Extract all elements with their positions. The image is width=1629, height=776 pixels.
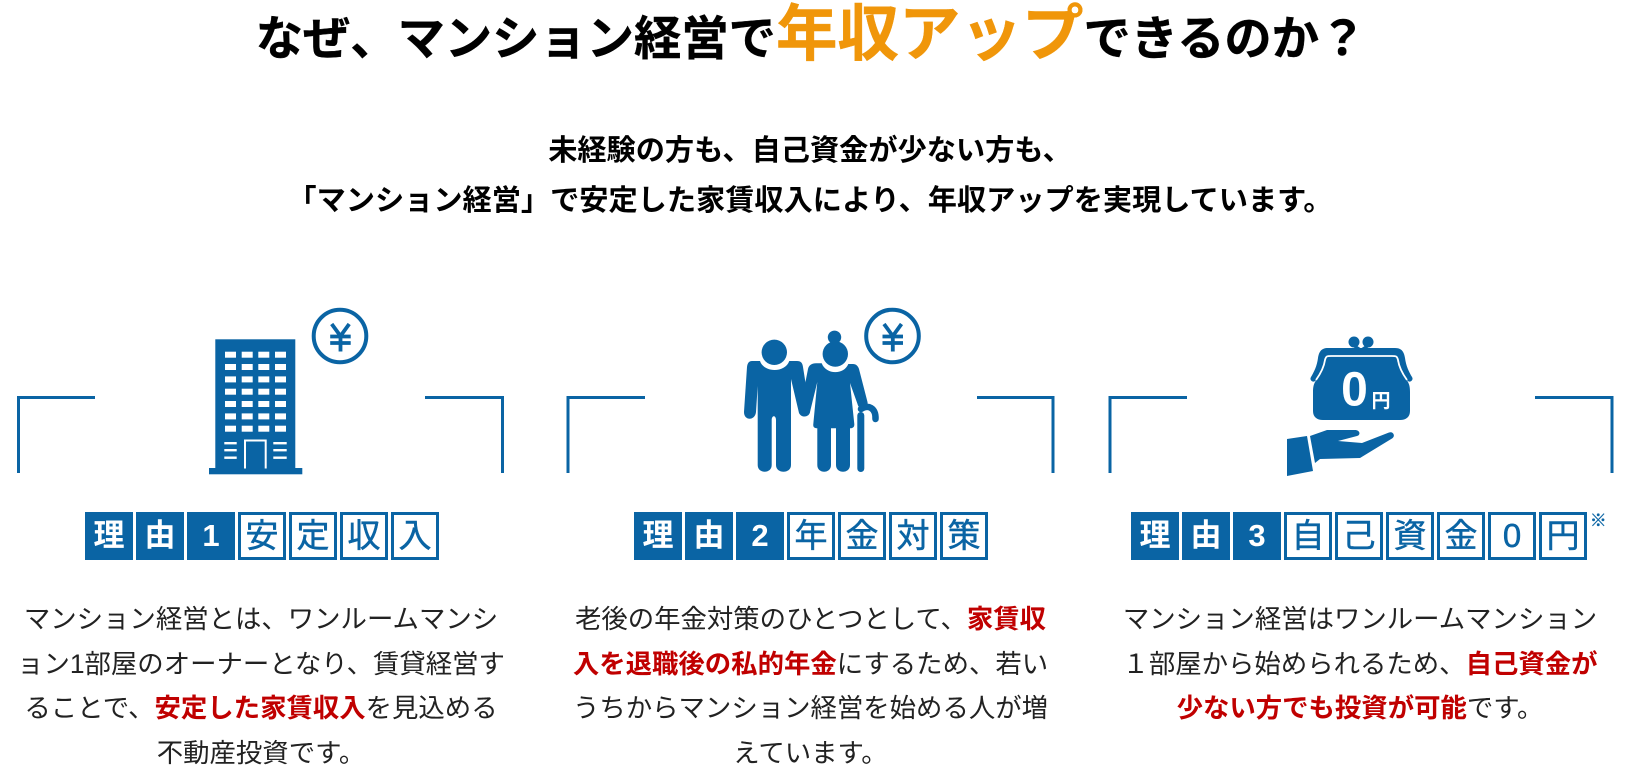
reason 1 heading tiles: 安 (246, 517, 278, 554)
icon: coin purse (1310, 336, 1413, 420)
reason 2 heading tiles: 年 (794, 517, 828, 554)
panel: reason 3 zero own funds (1108, 336, 1614, 723)
purse yen label: 円 (1371, 391, 1391, 412)
purse label: 0 (1341, 364, 1368, 416)
reason 1 heading tiles (85, 512, 439, 560)
reason 3 heading tiles: 3 (1248, 518, 1266, 553)
reason 3 heading tiles: 理 (1140, 518, 1170, 553)
reason 2 heading tiles: 理 (642, 518, 674, 553)
icon: elderly couple (744, 331, 876, 472)
reason 1 heading tiles: 定 (296, 517, 330, 554)
reason 1 heading tiles: 由 (144, 518, 176, 553)
subtitle text block (287, 134, 1333, 216)
title: なぜ、マンション経営で年収アップできるのか？ (256, 0, 1366, 69)
reason 2 heading tiles: 策 (948, 517, 980, 554)
reason 2 body text: うちからマンション経営を始める人が増 (573, 693, 1048, 723)
reason 1 body text (17, 604, 505, 768)
reason 2 heading tiles: 金 (846, 517, 878, 554)
reason 1 body text: マンション経営とは、ワンルームマンシ (24, 604, 498, 634)
bracket frame (568, 398, 1053, 473)
reason 2 heading tiles: 対 (896, 517, 930, 554)
reason 3 body text: マンション経営はワンルームマンション (1123, 604, 1597, 634)
reason 2 body text: 入を退職後の私的年金にするため、若い (573, 649, 1048, 679)
reason 3 heading tiles: 資 (1394, 517, 1426, 554)
reason 3 heading tiles (1131, 512, 1606, 560)
reason 1 heading tiles: 収 (348, 517, 380, 554)
reason 3 body text: 少ない方でも投資が可能です。 (1177, 693, 1543, 723)
reason 1 body text: ることで、安定した家賃収入を見込める (24, 693, 498, 723)
reason 3 heading tiles: 己 (1342, 517, 1376, 554)
reason 1 body text: ョン1部屋のオーナーとなり、賃貸経営す (17, 649, 505, 679)
reason 2 heading tiles (634, 512, 988, 560)
reason 3 heading tiles: 自 (1292, 517, 1324, 554)
icon: yen coin (866, 310, 919, 362)
subtitle text block: 未経験の方も、自己資金が少ない方も、 (548, 134, 1072, 166)
reason 3 heading tiles: 0 (1503, 517, 1521, 554)
reason 3 heading tiles: 由 (1190, 518, 1222, 553)
reason 2 body text: えています。 (733, 738, 888, 768)
reason 1 heading tiles: 1 (202, 518, 220, 553)
reason 3 heading tiles: 円 (1546, 517, 1580, 554)
reason 2 heading tiles: 2 (751, 518, 769, 553)
reason 2 heading tiles: 由 (694, 518, 724, 553)
bracket frame (1110, 398, 1612, 473)
icon: open hand (1287, 430, 1394, 476)
reason 3 heading tiles: 金 (1444, 517, 1478, 554)
reason 3 body text: １部屋から始められるため、自己資金が (1122, 649, 1598, 679)
icon: yen coin (314, 310, 366, 362)
reason 2 body text: 老後の年金対策のひとつとして、家賃収 (575, 604, 1046, 634)
panel: reason 2 pension (566, 308, 1054, 768)
footnote mark: ※ (1590, 512, 1606, 530)
reason 1 body text: 不動産投資です。 (157, 738, 365, 768)
reason 2 body text (573, 604, 1048, 768)
subtitle text block: 「マンション経営」で安定した家賃収入により、年収アップを実現しています。 (287, 184, 1333, 216)
icon: office building (209, 339, 302, 474)
reason 3 body text (1122, 604, 1598, 723)
reason 1 heading tiles: 入 (398, 517, 432, 554)
panel: reason 1 stable income (17, 308, 505, 768)
bracket frame (18, 398, 502, 473)
reason 1 heading tiles: 理 (94, 518, 124, 553)
